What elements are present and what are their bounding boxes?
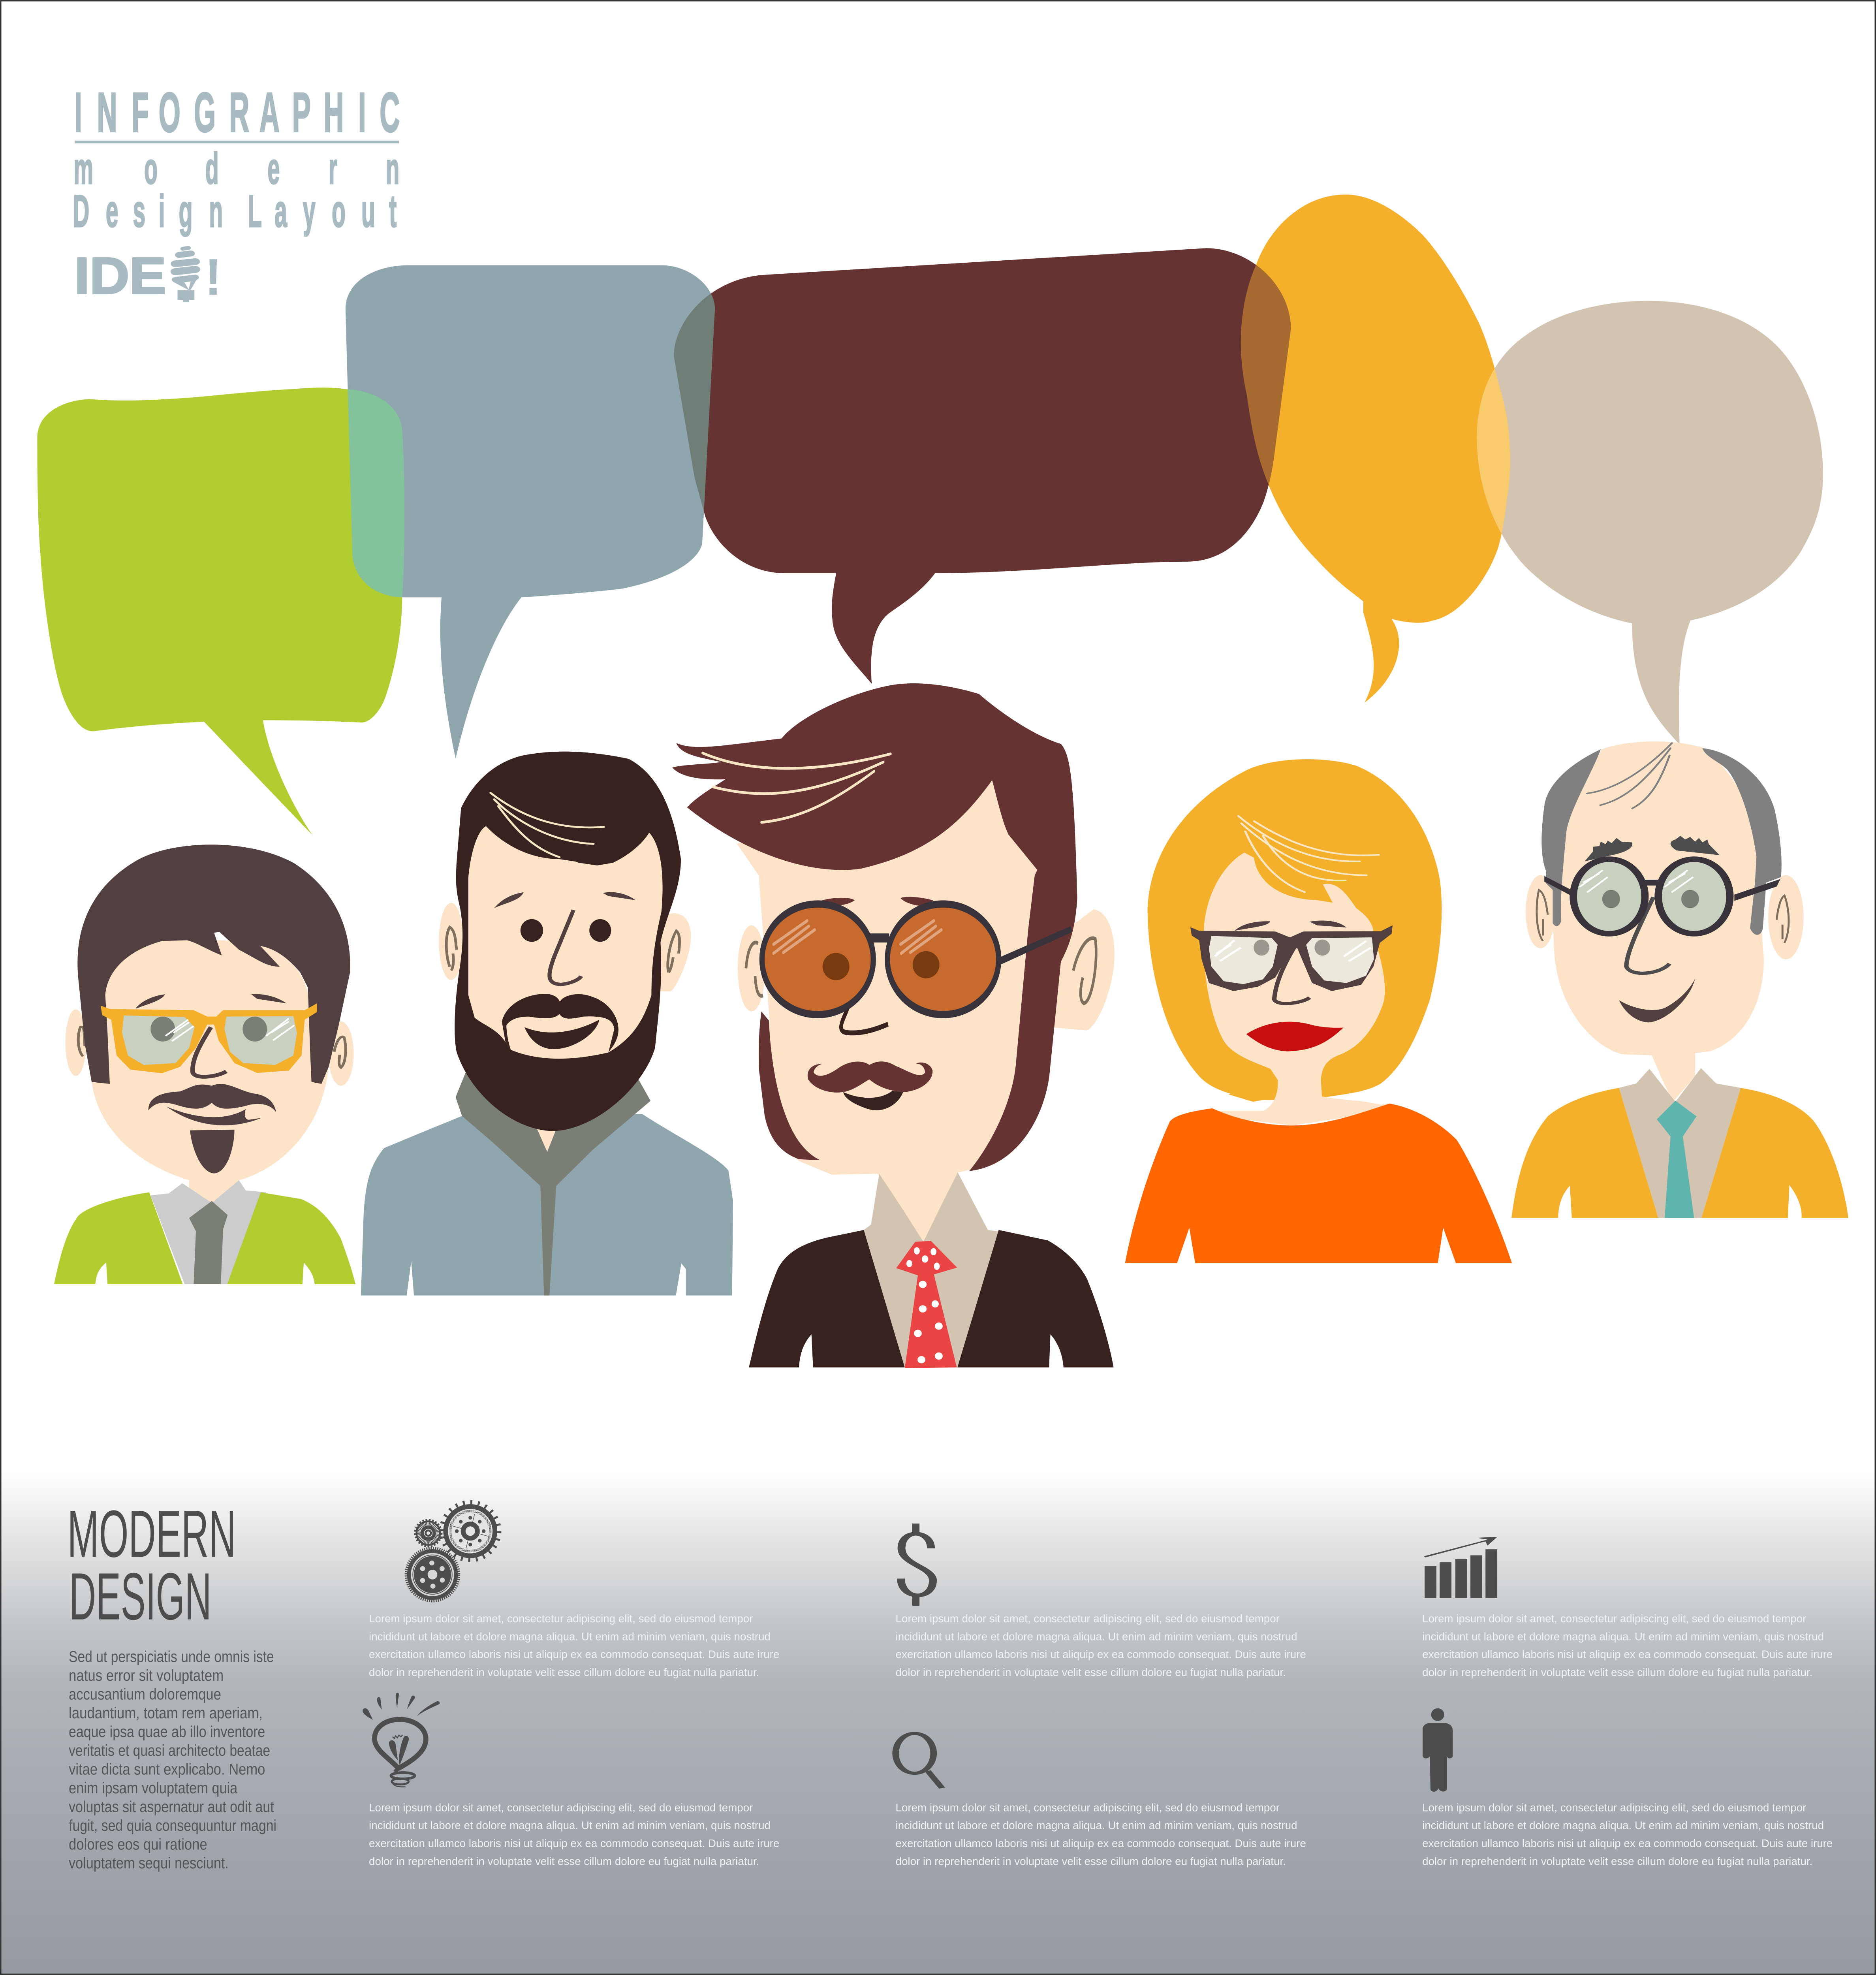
text block: row 2 column 3: dolor in reprehenderit in voluptate velit esse cillum dolore eu fugiat nulla pariatur. xyxy=(1422,1855,1812,1867)
tie xyxy=(189,1201,227,1284)
scarf collar xyxy=(456,1072,650,1296)
left paragraph xyxy=(69,1648,276,1872)
shirt collar xyxy=(864,1172,999,1367)
hair highlights xyxy=(1239,816,1379,892)
face and neck xyxy=(92,939,328,1205)
header title block xyxy=(73,81,400,306)
heading: MODERN DESIGN: MODERN xyxy=(68,1496,236,1571)
glasses lenses xyxy=(122,1016,297,1065)
lens glints xyxy=(165,1018,294,1041)
tie dots xyxy=(906,1247,943,1363)
IDEA wordmark xyxy=(74,247,222,306)
text block: row 2 column 1 xyxy=(369,1801,779,1867)
speech bubble: green xyxy=(37,387,404,835)
face and neck xyxy=(1203,853,1390,1125)
text block: row 2 column 1: dolor in reprehenderit in voluptate velit esse cillum dolore eu fugiat nulla pariatur. xyxy=(369,1855,759,1867)
text block: row 1 column 2: incididunt ut labore et dolore magna aliqua. Ut enim ad minim veniam, quis nostrud xyxy=(896,1630,1297,1642)
eyebrows xyxy=(1235,921,1346,931)
text block: row 1 column 2: exercitation ullamco laboris nisi ut aliquip ex ea commodo consequat. Duis aute irure xyxy=(896,1648,1306,1661)
left paragraph: fugit, sed quia consequuntur magni xyxy=(69,1817,276,1834)
neck xyxy=(879,1172,958,1242)
text block: row 1 column 3: Lorem ipsum dolor sit amet, consectetur adipiscing elit, sed do eiusmod tempor xyxy=(1422,1612,1806,1625)
speech bubble: beige xyxy=(1477,301,1823,745)
text block: row 2 column 3 xyxy=(1422,1801,1833,1867)
icon: light bulb letter A xyxy=(173,248,198,302)
mouth xyxy=(1619,979,1695,1023)
wordmark exclamation: ! xyxy=(205,248,222,306)
hair strands xyxy=(1587,743,1672,809)
text block: row 2 column 3: incididunt ut labore et dolore magna aliqua. Ut enim ad minim veniam, quis nostrud xyxy=(1422,1819,1824,1832)
text block: row 2 column 3: Lorem ipsum dolor sit amet, consectetur adipiscing elit, sed do eiusmod tempor xyxy=(1422,1801,1806,1813)
bubble overlap: maroon and orange xyxy=(1241,265,1291,485)
pupils xyxy=(823,951,940,980)
bubble overlap: green and blue xyxy=(348,389,404,597)
ears xyxy=(66,1009,353,1086)
shirt xyxy=(150,1180,266,1284)
goatee xyxy=(190,1130,235,1174)
glasses frame xyxy=(101,1003,317,1073)
large gear xyxy=(441,1502,499,1560)
person 4: woman with blonde hair and orange top xyxy=(1125,759,1512,1263)
ears xyxy=(738,909,1115,1031)
left paragraph: vitae dicta sunt explicabo. Nemo xyxy=(69,1761,265,1778)
text block: row 2 column 2: dolor in reprehenderit in voluptate velit esse cillum dolore eu fugiat nulla pariatur. xyxy=(896,1855,1286,1867)
jacket xyxy=(54,1192,355,1284)
eyes xyxy=(521,919,611,942)
round glasses xyxy=(1544,859,1780,934)
hair xyxy=(1148,759,1442,1100)
bottom gradient band xyxy=(0,1471,1876,1975)
icon: dollar sign xyxy=(901,1524,933,1606)
lips xyxy=(1246,1022,1344,1051)
text block: row 1 column 3: incididunt ut labore et dolore magna aliqua. Ut enim ad minim veniam, quis nostrud xyxy=(1422,1630,1824,1642)
sunglasses lenses xyxy=(762,904,999,1015)
text block: row 1 column 1: incididunt ut labore et dolore magna aliqua. Ut enim ad minim veniam, quis nostrud xyxy=(369,1630,771,1642)
person 2: bearded man in blue shirt xyxy=(361,752,733,1296)
left paragraph: dolores eos qui ratione xyxy=(69,1836,207,1853)
sunglasses xyxy=(762,904,1072,1015)
text block: row 2 column 2: exercitation ullamco laboris nisi ut aliquip ex ea commodo consequat. Duis aute irure xyxy=(896,1837,1306,1849)
eyebrows xyxy=(822,897,933,906)
face and neck xyxy=(737,780,1038,1240)
moustache xyxy=(149,1084,276,1112)
sunglasses bridge and temple xyxy=(869,926,1072,965)
hair highlights xyxy=(491,793,604,857)
nose xyxy=(841,1007,888,1033)
eyebrows xyxy=(494,892,635,908)
title underline xyxy=(75,141,399,143)
left paragraph: Sed ut perspiciatis unde omnis iste xyxy=(69,1648,274,1666)
nose xyxy=(549,910,581,984)
glasses bridge and temples xyxy=(1544,876,1780,901)
person 5: balding man with round glasses and orange jacket xyxy=(1511,741,1848,1218)
neck xyxy=(537,1129,556,1152)
glasses lenses xyxy=(1209,936,1374,984)
nose xyxy=(1626,897,1669,973)
speech bubbles xyxy=(37,194,1823,835)
left paragraph: enim ipsam voluptatem quia xyxy=(69,1779,238,1797)
icon: gears xyxy=(407,1502,499,1600)
hair xyxy=(672,683,1077,1171)
hair xyxy=(1541,748,1782,935)
ear details xyxy=(746,938,1096,1003)
glasses frame xyxy=(1190,925,1393,991)
person 3: man with round sunglasses and polka dot tie xyxy=(672,683,1115,1368)
ears xyxy=(439,903,691,991)
text block: row 2 column 3: exercitation ullamco laboris nisi ut aliquip ex ea commodo consequat. Duis aute irure xyxy=(1422,1837,1833,1849)
top xyxy=(1125,1104,1512,1263)
lens glints xyxy=(773,921,942,954)
left paragraph: eaque ipsa quae ab illo inventore xyxy=(69,1723,265,1741)
mouth xyxy=(843,1091,903,1110)
text block: row 1 column 3: exercitation ullamco laboris nisi ut aliquip ex ea commodo consequat. Duis aute irure xyxy=(1422,1648,1833,1661)
title: INFOGRAPHIC: INFOGRAPHIC xyxy=(74,81,400,144)
left paragraph: voluptas sit aspernatur aut odit aut xyxy=(69,1798,274,1816)
eyebrows xyxy=(135,994,287,1008)
left paragraph: accusantium doloremque xyxy=(69,1686,221,1703)
pupils xyxy=(1254,940,1330,956)
nose xyxy=(193,1027,226,1077)
speech bubble: maroon xyxy=(674,248,1291,684)
moustache xyxy=(502,994,618,1053)
ear details xyxy=(446,927,680,972)
jacket xyxy=(749,1230,1114,1367)
lower gear xyxy=(407,1549,458,1600)
text block: row 2 column 1: exercitation ullamco laboris nisi ut aliquip ex ea commodo consequat. Duis aute irure xyxy=(369,1837,779,1849)
pupils xyxy=(1602,890,1699,908)
hair highlights xyxy=(703,753,891,822)
text block: row 2 column 2: Lorem ipsum dolor sit amet, consectetur adipiscing elit, sed do eiusmod tempor xyxy=(896,1801,1280,1813)
tie shape xyxy=(896,1241,957,1368)
icon: standing person xyxy=(1423,1708,1453,1792)
text block: row 1 column 2: Lorem ipsum dolor sit amet, consectetur adipiscing elit, sed do eiusmod tempor xyxy=(896,1612,1280,1625)
left paragraph: natus error sit voluptatem xyxy=(69,1667,224,1684)
icon: growth bar chart xyxy=(1424,1537,1497,1598)
text block: row 1 column 3 xyxy=(1422,1612,1833,1678)
text block: row 1 column 1: dolor in reprehenderit in voluptate velit esse cillum dolore eu fugiat nulla pariatur. xyxy=(369,1666,759,1678)
text block: row 1 column 3: dolor in reprehenderit in voluptate velit esse cillum dolore eu fugiat nulla pariatur. xyxy=(1422,1666,1812,1678)
polka dot tie xyxy=(896,1241,957,1368)
shirt xyxy=(361,1114,733,1296)
speech bubble: orange xyxy=(1241,194,1510,703)
text block: row 2 column 2 xyxy=(896,1801,1306,1867)
face xyxy=(468,826,663,1059)
text block: row 1 column 2 xyxy=(896,1612,1306,1678)
bubble overlap: blue and maroon xyxy=(674,293,715,512)
hair xyxy=(77,845,350,1084)
small gear xyxy=(415,1520,441,1546)
lens glints xyxy=(1215,940,1371,961)
text block: row 1 column 1 xyxy=(369,1612,779,1678)
text block: row 1 column 1: exercitation ullamco laboris nisi ut aliquip ex ea commodo consequat. Duis aute irure xyxy=(369,1648,779,1661)
eyebrows xyxy=(1585,836,1720,861)
heading: MODERN DESIGN xyxy=(68,1496,236,1634)
left paragraph: voluptatem sequi nesciunt. xyxy=(69,1855,229,1872)
moustache xyxy=(808,1061,932,1093)
shirt collar xyxy=(1619,1068,1741,1218)
hair and beard xyxy=(455,752,681,1131)
ears xyxy=(1526,875,1804,959)
pupils xyxy=(150,1017,267,1042)
subtitle: modern: modern xyxy=(73,144,399,193)
text block: row 2 column 1: Lorem ipsum dolor sit amet, consectetur adipiscing elit, sed do eiusmod tempor xyxy=(369,1801,753,1813)
mouth xyxy=(166,1106,261,1125)
lens glints xyxy=(1580,870,1693,892)
hair strand over neck xyxy=(1229,1071,1274,1102)
bubble overlap: orange and beige xyxy=(1477,369,1510,534)
tie xyxy=(1657,1100,1697,1218)
wordmark letters IDE: IDE xyxy=(74,247,166,305)
mouth xyxy=(524,1019,599,1049)
heading: MODERN DESIGN: DESIGN xyxy=(69,1559,212,1634)
left paragraph: veritatis et quasi architecto beatae xyxy=(69,1742,270,1759)
text block: row 2 column 1: incididunt ut labore et dolore magna aliqua. Ut enim ad minim veniam, quis nostrud xyxy=(369,1819,771,1832)
glasses lenses xyxy=(1573,859,1730,934)
text block: row 1 column 2: dolor in reprehenderit in voluptate velit esse cillum dolore eu fugiat nulla pariatur. xyxy=(896,1666,1286,1678)
text block: row 2 column 2: incididunt ut labore et dolore magna aliqua. Ut enim ad minim veniam, quis nostrud xyxy=(896,1819,1297,1832)
speech bubble: blue-grey xyxy=(346,265,715,759)
text block: row 1 column 1: Lorem ipsum dolor sit amet, consectetur adipiscing elit, sed do eiusmod tempor xyxy=(369,1612,753,1625)
icon: magnifying glass xyxy=(896,1733,942,1788)
icon: light bulb xyxy=(363,1693,440,1787)
jacket xyxy=(1511,1088,1848,1218)
fringe strand xyxy=(552,844,613,865)
head and neck xyxy=(1550,741,1764,1102)
left paragraph: laudantium, totam rem aperiam, xyxy=(69,1704,263,1722)
ear details xyxy=(1537,890,1789,943)
person 1: man in green jacket xyxy=(54,845,355,1284)
ear details xyxy=(78,1027,346,1068)
nose xyxy=(1274,946,1310,1004)
subtitle: Design Layout: DesignLayout xyxy=(73,186,397,237)
